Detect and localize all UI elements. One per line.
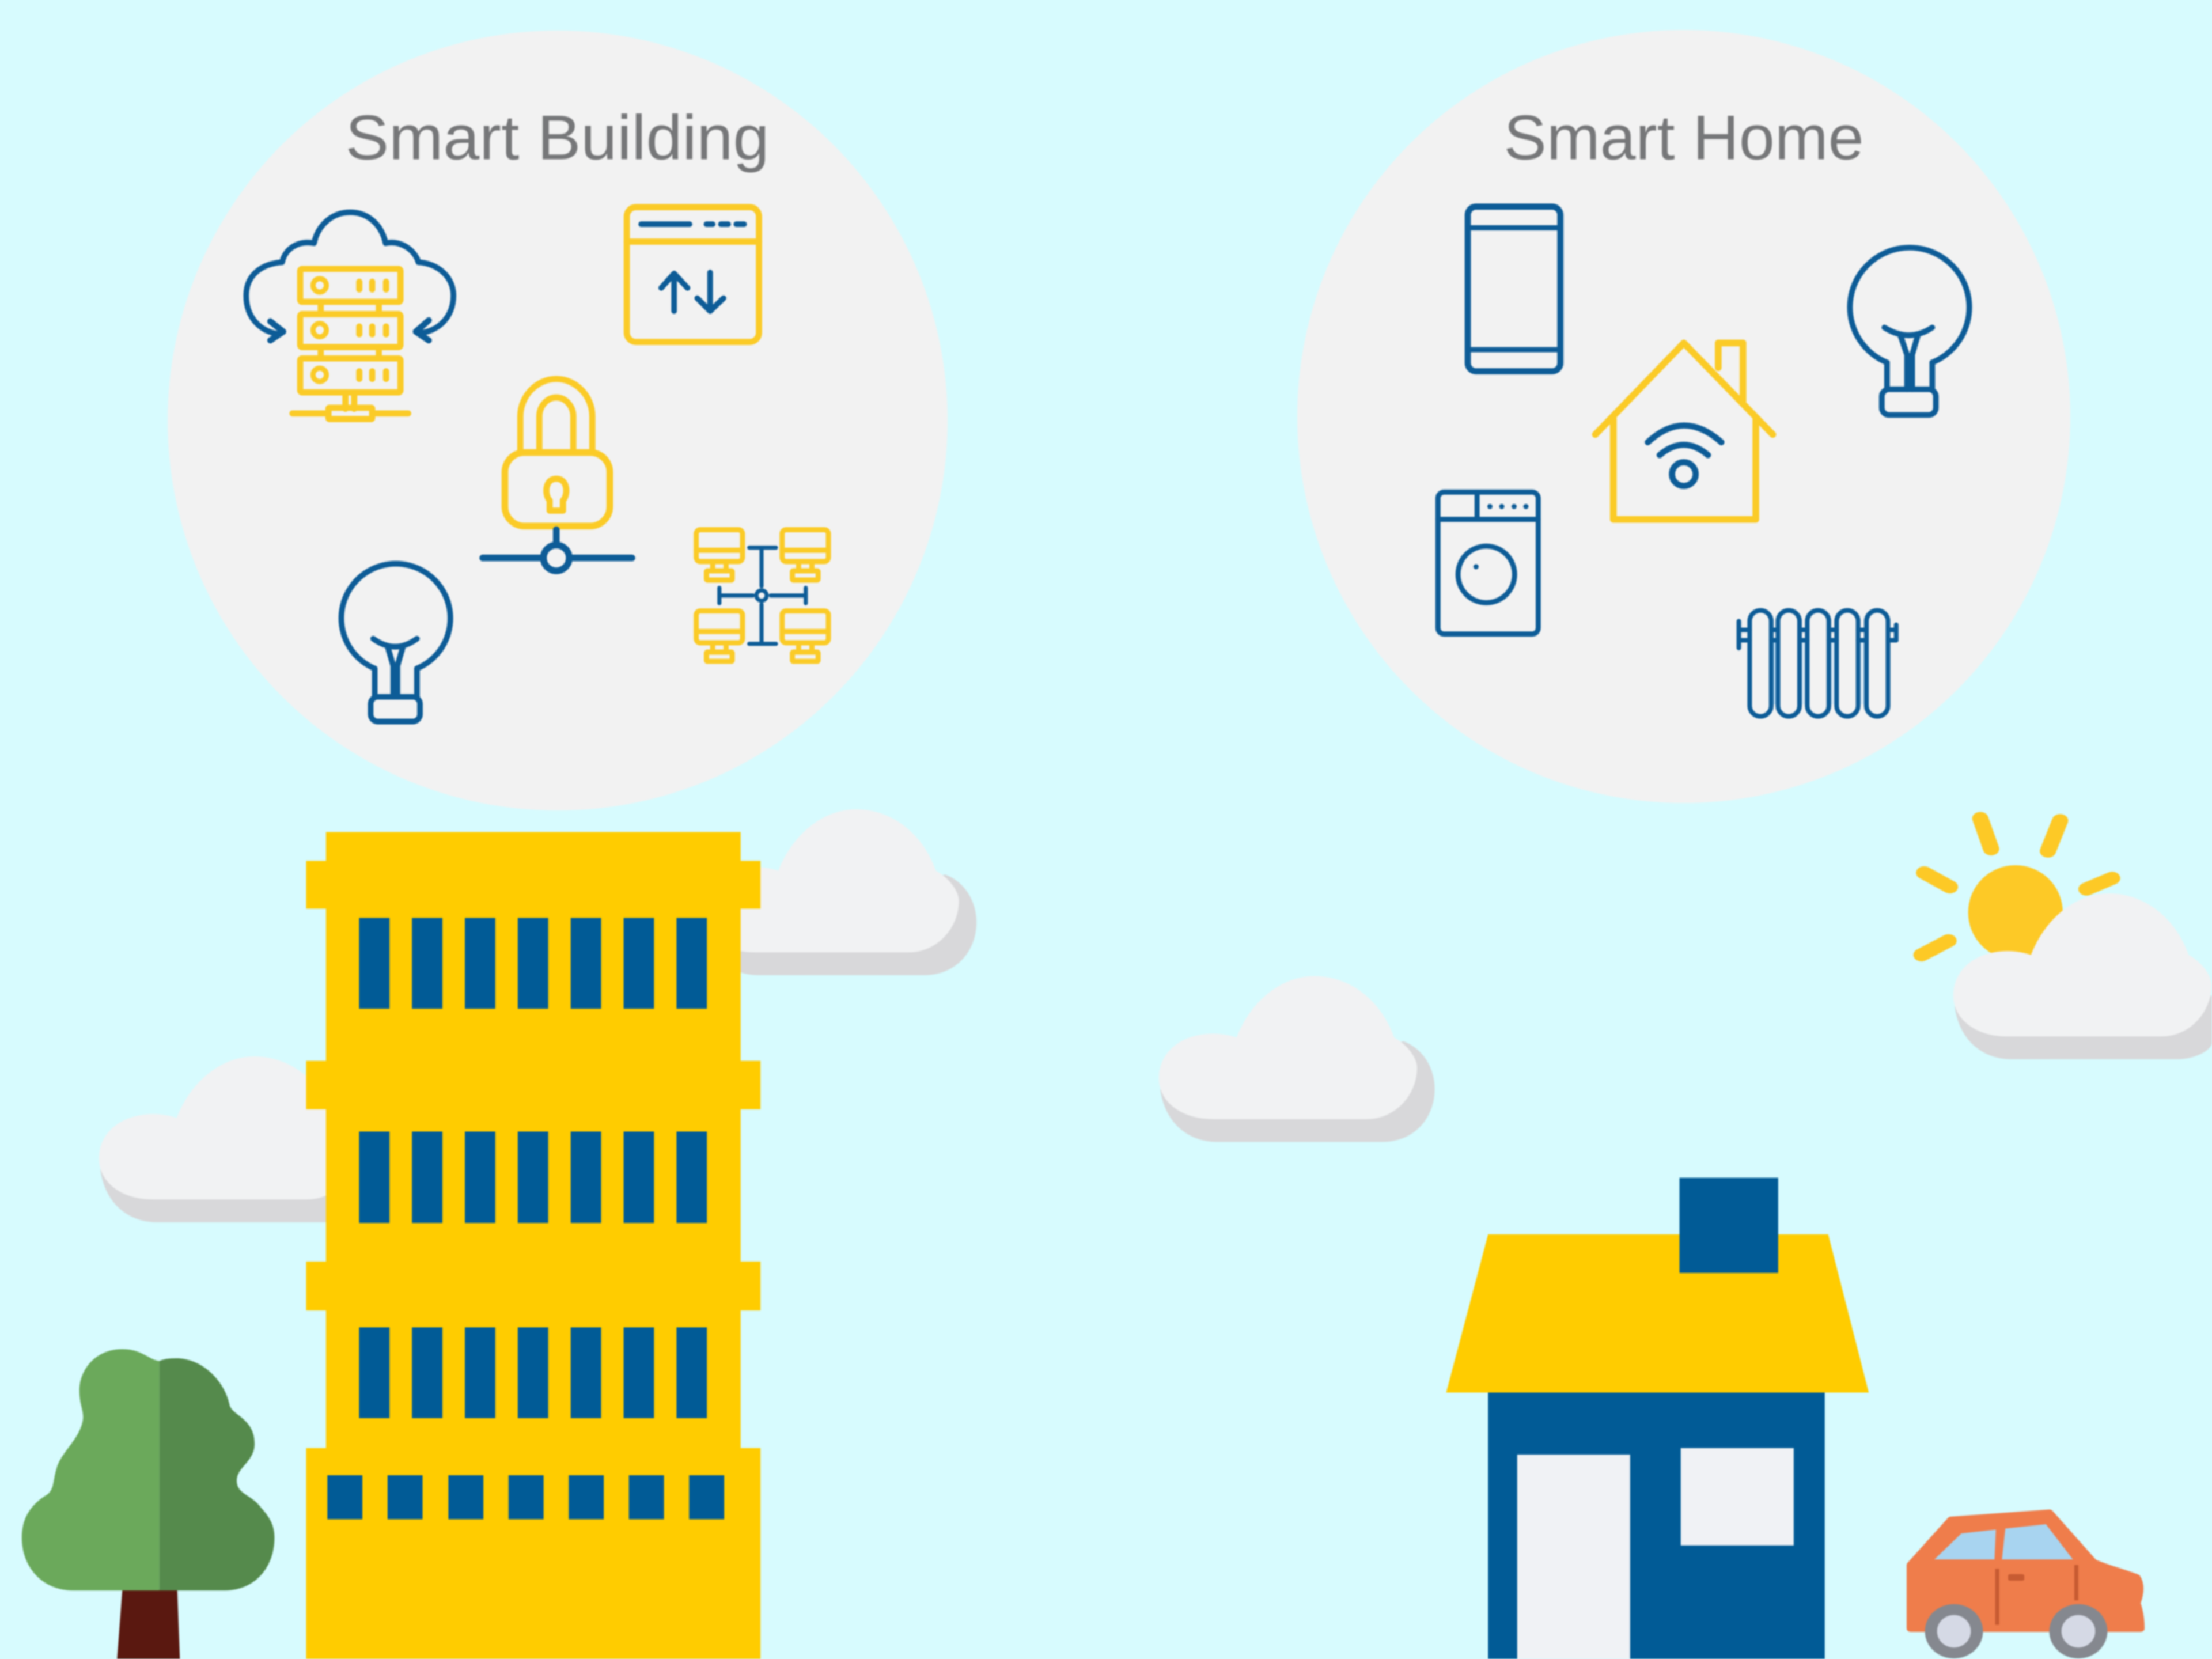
smart building icons and heading — [246, 103, 828, 722]
cloud behind building, left — [99, 1056, 375, 1222]
tree trunk — [117, 1589, 180, 1659]
sun — [1922, 819, 2112, 960]
tree — [22, 1349, 274, 1659]
cloud, middle — [1159, 976, 1435, 1142]
panel: smart home — [1297, 30, 2070, 803]
building windows — [327, 918, 724, 1519]
car door handle — [2008, 1574, 2024, 1581]
heading: Smart Home: Smart Home — [1504, 103, 1864, 173]
house walls — [1488, 1392, 1825, 1659]
building body and ledges — [306, 832, 760, 1659]
panel: smart building — [168, 31, 948, 810]
sun, cloud, house and car scene — [1159, 819, 2212, 1659]
yellow office building — [306, 832, 760, 1659]
icon: browser window with arrows — [627, 207, 759, 342]
icon: computer network — [696, 530, 828, 661]
car wheels — [1925, 1604, 2107, 1658]
house chimney — [1679, 1178, 1778, 1273]
car windows — [1934, 1524, 2073, 1559]
smart home circle background — [1297, 30, 2070, 803]
icon: radiator — [1739, 611, 1896, 717]
smart home icons and heading — [1438, 103, 1969, 717]
smart building circle background — [168, 31, 948, 810]
car — [1911, 1513, 2141, 1658]
icon: washing machine — [1438, 492, 1538, 634]
tree crown light side — [22, 1349, 160, 1590]
tree crown dark side — [160, 1358, 274, 1590]
house door — [1517, 1455, 1630, 1659]
icon: wifi house — [1595, 343, 1773, 520]
car body — [1911, 1513, 2141, 1628]
house roof — [1446, 1234, 1869, 1393]
icon: cloud server — [246, 213, 453, 419]
icon: padlock on network — [483, 379, 632, 571]
icon: smartphone — [1468, 207, 1560, 371]
house window — [1681, 1448, 1794, 1546]
icon: light bulb — [342, 564, 450, 722]
heading: Smart Building: Smart Building — [346, 103, 769, 173]
cloud behind building, right — [700, 809, 976, 975]
house — [1446, 1178, 1869, 1659]
icon: light bulb — [1850, 248, 1969, 415]
cloud in front of sun — [1953, 893, 2212, 1059]
car door lines — [1997, 1565, 2076, 1625]
